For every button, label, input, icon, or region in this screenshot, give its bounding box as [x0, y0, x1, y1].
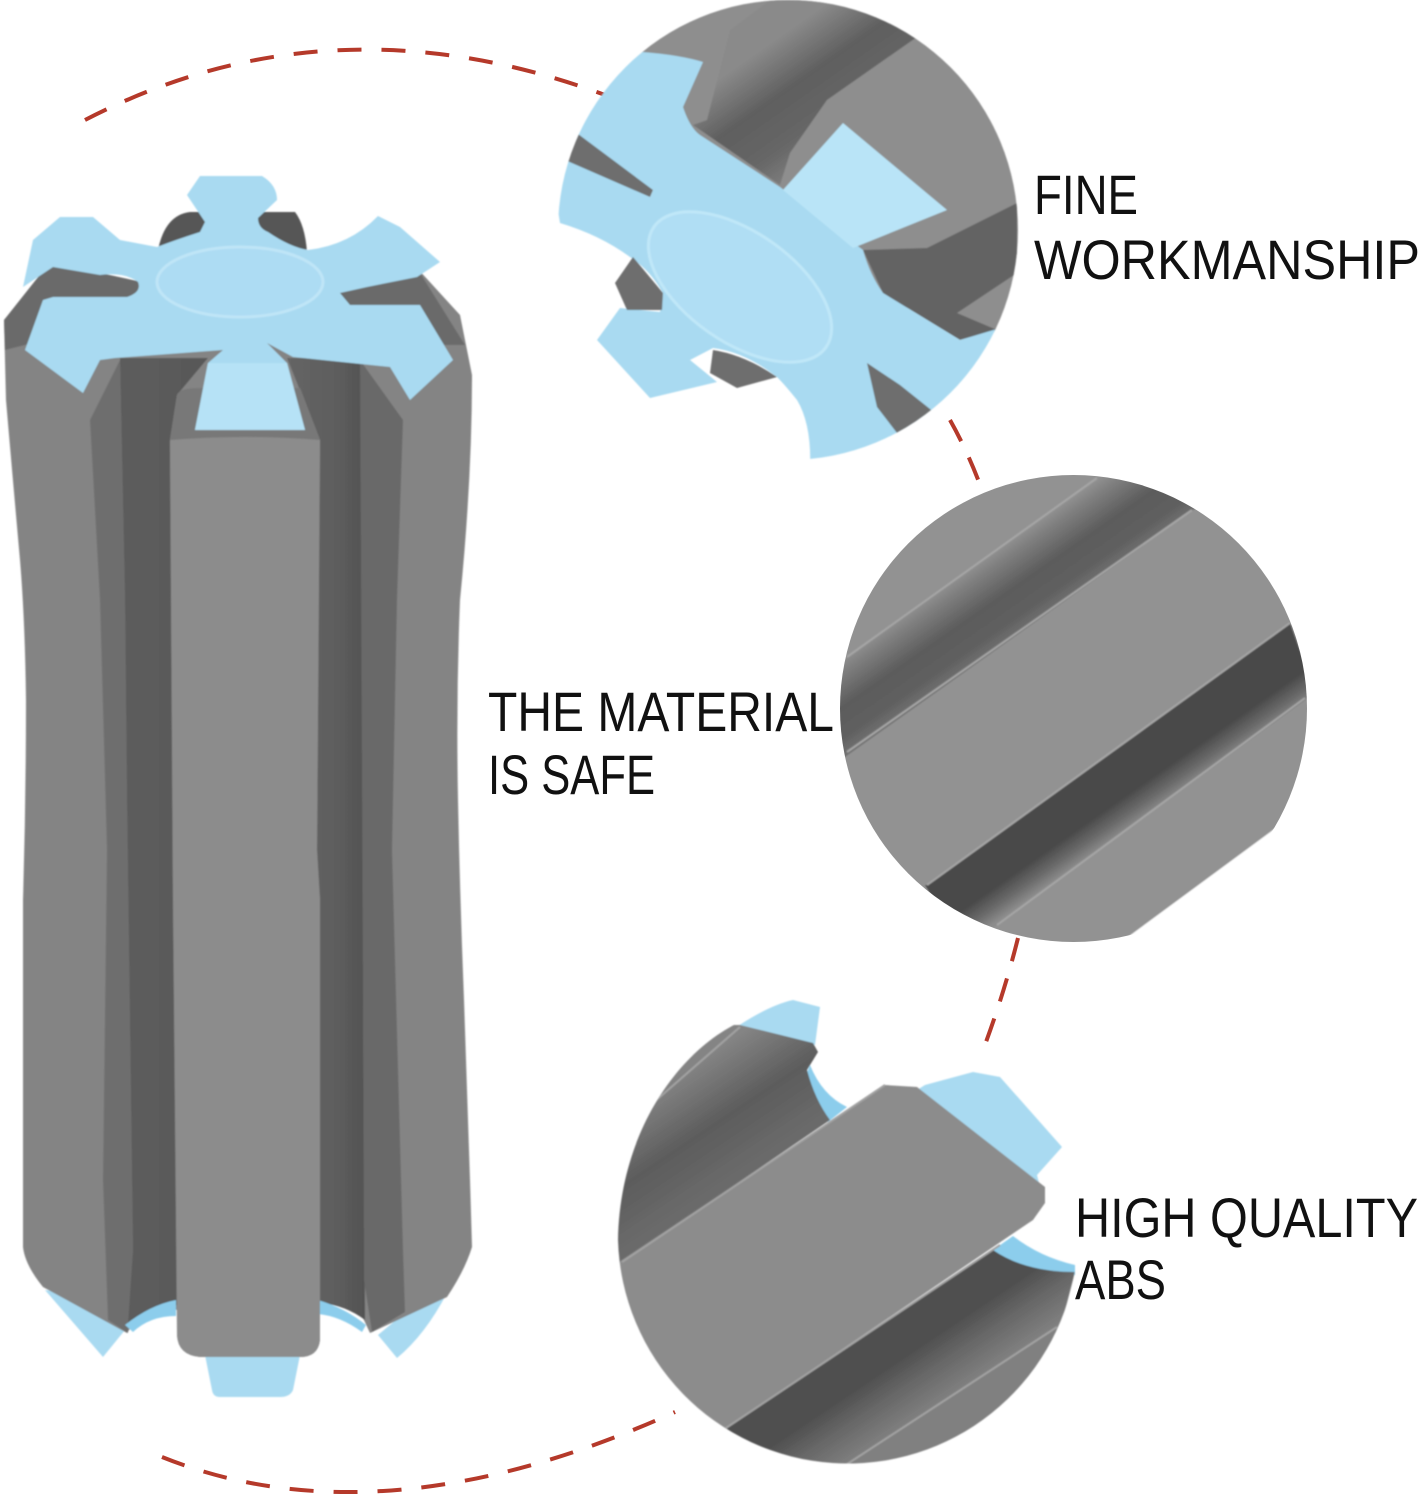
label: the material is safe [488, 680, 834, 806]
label: high quality ABS [1075, 1186, 1418, 1311]
upper dark rim right [338, 268, 465, 345]
lower dark groove [925, 623, 1315, 945]
back dark prong wells [158, 212, 307, 252]
dashed connector: bottom arc [162, 1412, 675, 1492]
left medium strip [90, 360, 133, 1333]
blue tabs [738, 1000, 1075, 1275]
blue arcs at slot bottoms [125, 1300, 176, 1332]
hub ellipse [622, 182, 858, 392]
gray well upper left [568, 134, 654, 198]
label: the material is safe: THE MATERIAL [488, 680, 834, 743]
right medium strip [360, 360, 405, 1332]
bottom cutoff [1128, 828, 1274, 936]
label: high quality ABS: ABS [1075, 1248, 1166, 1311]
front prong highlight [195, 363, 305, 430]
gray well left [615, 257, 663, 310]
left slot [120, 358, 208, 1325]
upper groove [840, 478, 1195, 757]
groove edge highlights [847, 478, 1305, 925]
dashed connector: top arc [85, 50, 605, 120]
column top face [170, 388, 320, 440]
dark groove right [863, 203, 1017, 340]
gray well lower right [867, 363, 935, 433]
dark groove upper [693, 0, 917, 185]
bottom blue tabs [45, 1290, 447, 1397]
label: fine workmanship [1034, 163, 1420, 291]
right slot [287, 358, 365, 1320]
center column [170, 388, 320, 1357]
blue star cap [23, 176, 453, 430]
star centre ellipse [157, 247, 323, 317]
main product: bottle sleeve [4, 176, 472, 1397]
label: fine workmanship: FINE [1034, 163, 1138, 226]
centre band [610, 1085, 1045, 1430]
gray well bottom [710, 350, 777, 388]
body silhouette [4, 268, 472, 1357]
lower band [852, 1332, 1056, 1464]
upper dark groove [600, 1025, 830, 1262]
detail circle: high quality ABS close-up [600, 1000, 1075, 1490]
dashed connector: right upper segment [950, 420, 982, 490]
gray housing [640, 0, 1020, 340]
edge highlights [622, 1027, 1057, 1472]
gray base [835, 470, 1315, 950]
lower dark groove [723, 1250, 1075, 1480]
upper dark rim left [4, 262, 142, 350]
blue star [550, 52, 1010, 470]
dashed connector: right lower segment [986, 938, 1018, 1042]
label: the material is safe: IS SAFE [488, 743, 655, 806]
detail circle: fine workmanship close-up [550, 0, 1020, 470]
light prong [783, 123, 947, 248]
detail circle: material close-up [835, 470, 1320, 960]
